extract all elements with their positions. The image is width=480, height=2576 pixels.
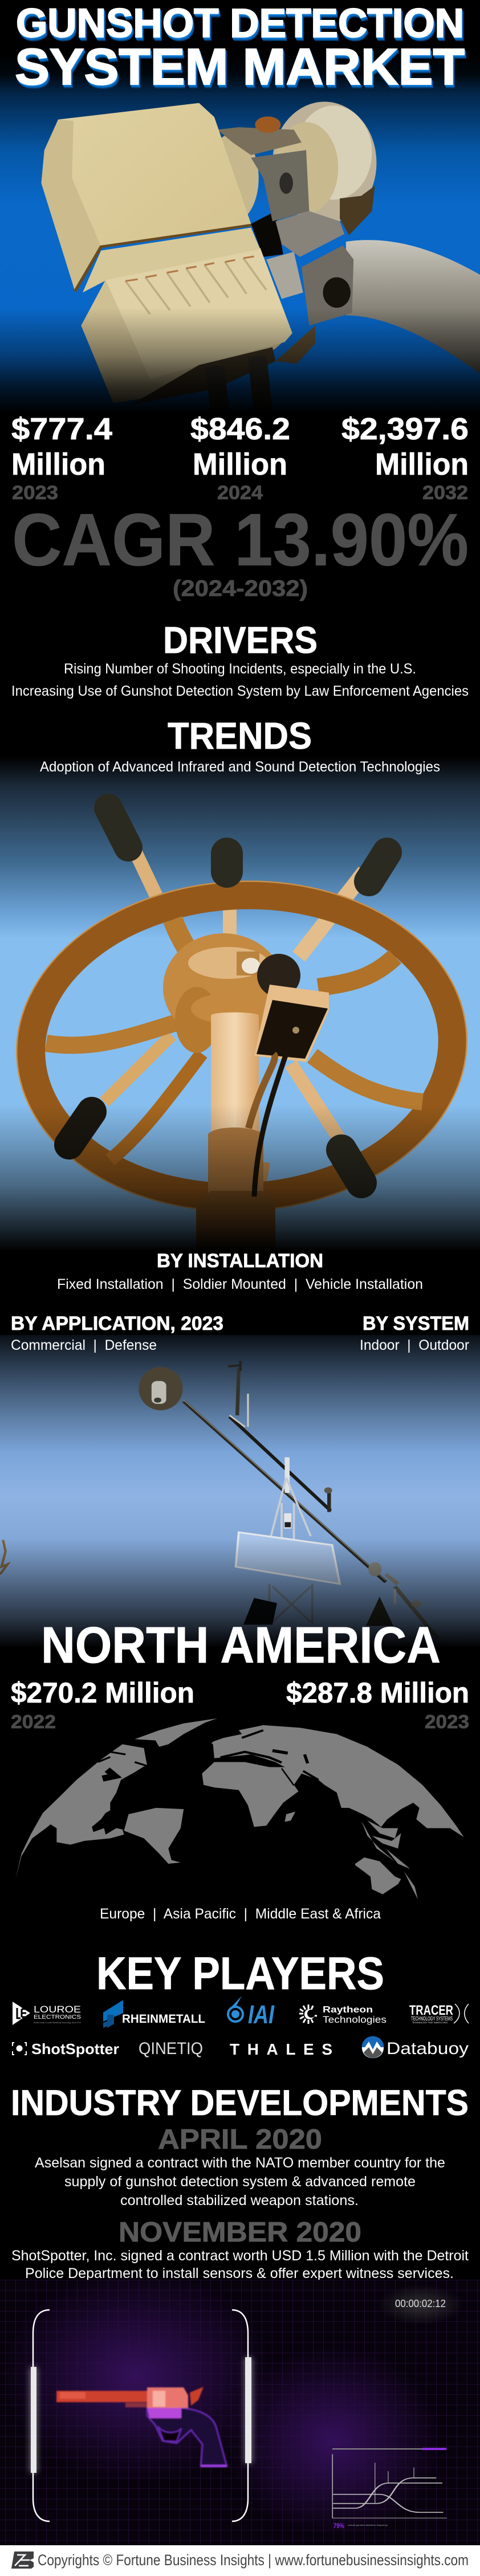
logo: ShotSpotter: ShotSpotter (31, 2040, 119, 2057)
timer: 00:00:02:12 (395, 2298, 446, 2309)
market size 2032: Million (375, 447, 469, 481)
logo: Louroe Electronics: ELECTRONICS (34, 2014, 81, 2020)
drivers text: Increasing Use of Gunshot Detection System by Law Enforcement Agencies (11, 683, 469, 699)
market size 2024: Million (193, 447, 287, 481)
market size 2032: 2032 (422, 482, 468, 504)
regional value 2022 (11, 1677, 194, 1732)
by system segment (360, 1313, 469, 1353)
logo: Raytheon Technologies: Raytheon (323, 2005, 373, 2015)
logo: Louroe Electronics: LOUROE (34, 2004, 81, 2015)
market size 2032: $2,397.6 (341, 412, 469, 446)
north america heading: NORTH AMERICA (41, 1617, 441, 1674)
development: April 2020: controlled stabilized weapon stations. (120, 2193, 359, 2208)
footer logo (11, 2551, 34, 2569)
logo: Louroe Electronics: World Leader in Audio Monitoring Technology Since 1979 (34, 2021, 82, 2024)
logo: Thales: THALES (230, 2040, 332, 2058)
development: November 2020 (11, 2217, 469, 2281)
drivers text (11, 661, 469, 699)
development: April 2020: supply of gunshot detection system & advanced remote (64, 2174, 416, 2190)
by installation segment: BY INSTALLATION (157, 1250, 323, 1272)
line chart: overall gunshot detection frequency (348, 2524, 388, 2526)
by system segment: BY SYSTEM (363, 1313, 469, 1334)
key players heading: KEY PLAYERS (96, 1948, 384, 1999)
trends text: Adoption of Advanced Infrared and Sound Detection Technologies (40, 759, 440, 775)
CAGR: (2024-2032) (173, 576, 308, 601)
development: April 2020: APRIL 2020 (158, 2124, 322, 2155)
market size 2024 (190, 412, 290, 504)
logo: IAI: IAI (248, 2000, 275, 2029)
market size 2024: $846.2 (190, 412, 290, 446)
regional value 2022: $270.2 Million (11, 1677, 194, 1709)
left bracket (30, 2310, 50, 2521)
logo: IAI (228, 1996, 275, 2029)
regional value 2023: $287.8 Million (286, 1677, 469, 1709)
regional value 2022: 2022 (11, 1711, 56, 1732)
drivers text: Rising Number of Shooting Incidents, especially in the U.S. (64, 661, 416, 677)
gun detection visual panel (0, 2268, 480, 2545)
development: April 2020 (35, 2124, 445, 2208)
logo: Rheinmetall (103, 2000, 205, 2028)
logo: QinetiQ: QINETIQ (139, 2039, 203, 2058)
title (15, 1, 465, 96)
by application segment: BY APPLICATION, 2023 (11, 1313, 223, 1334)
title: GUNSHOT DETECTION (16, 1, 464, 46)
development: April 2020: Aselsan signed a contract with the NATO member country for the (35, 2155, 445, 2171)
logo: Raytheon Technologies: Technologies (323, 2014, 387, 2025)
title: SYSTEM MARKET (15, 39, 465, 96)
footer bar (0, 2545, 480, 2576)
line chart: 79% (333, 2522, 344, 2530)
development: November 2020: NOVEMBER 2020 (119, 2217, 361, 2248)
other regions text: Europe | Asia Pacific | Middle East & Africa (100, 1906, 381, 1922)
logo: Tracer Technology Systems: TECHNOLOGY THAT SAVES LIVES (412, 2021, 448, 2024)
market size 2023 (11, 412, 112, 504)
logo: Raytheon Technologies (299, 2005, 387, 2025)
trends heading: TRENDS (168, 715, 312, 757)
logo: Rheinmetall: RHEINMETALL (122, 2012, 205, 2026)
by application segment (11, 1313, 223, 1353)
by installation segment: Fixed Installation | Soldier Mounted | Vehicle Installation (57, 1276, 423, 1292)
development: November 2020: Police Department to install sensors & offer expert witness services. (25, 2265, 454, 2281)
logo: Databuoy: Databuoy (387, 2039, 469, 2058)
market size 2023: 2023 (12, 482, 58, 504)
logo: Tracer Technology Systems: TECHNOLOGY SYSTEMS (411, 2016, 453, 2022)
drivers heading: DRIVERS (163, 619, 318, 661)
market size 2023: Million (11, 447, 105, 481)
regional value 2023: 2023 (425, 1711, 469, 1732)
hero panel: acoustic sensor photo on blue sky (0, 0, 480, 416)
tower panel: sensor tower photo on sky (0, 1335, 480, 1648)
logo: Databuoy (361, 2036, 469, 2058)
logo: Tracer Technology Systems: TRACER (409, 2003, 453, 2018)
regional value 2023 (286, 1677, 469, 1732)
revolver hologram (56, 2387, 227, 2467)
by installation segment (57, 1250, 423, 1292)
market size 2023: $777.4 (11, 412, 112, 446)
by application segment: Commercial | Defense (11, 1337, 157, 1353)
market size 2024: 2024 (217, 482, 263, 504)
by system segment: Indoor | Outdoor (360, 1337, 469, 1353)
line chart (332, 2449, 447, 2530)
logo: Louroe Electronics (13, 2002, 82, 2025)
development: November 2020: ShotSpotter, Inc. signed a contract worth USD 1.5 Million with the Detroit (11, 2248, 469, 2264)
world globe map (15, 1718, 464, 1900)
right bracket (232, 2310, 253, 2521)
trends panel: sky and wheel sensor photo (0, 756, 480, 1251)
market size 2032 (341, 412, 469, 504)
